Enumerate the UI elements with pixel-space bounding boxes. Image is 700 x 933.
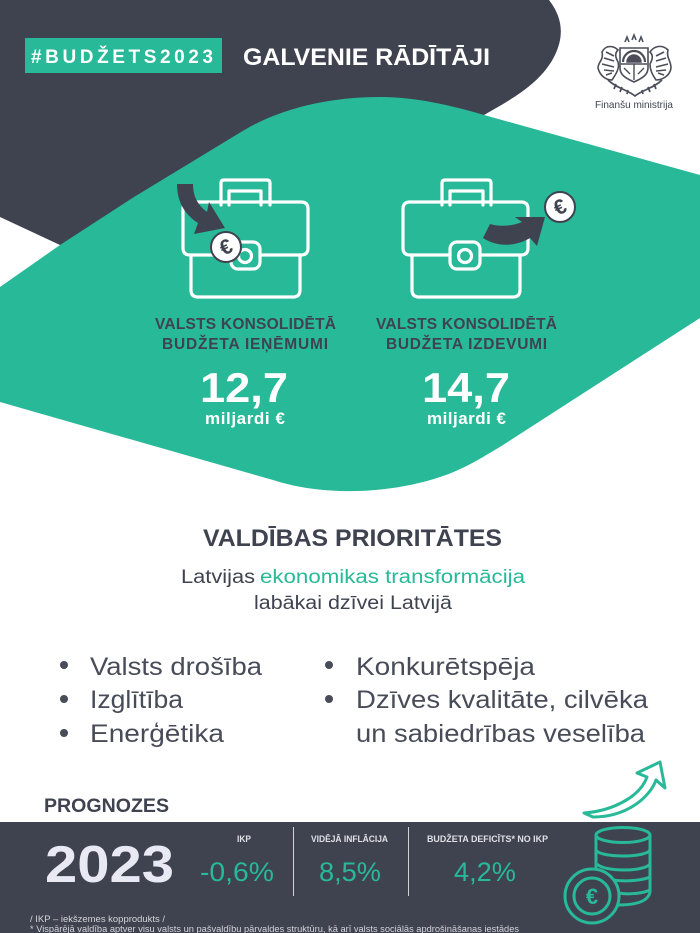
panel: budget revenue (155, 180, 336, 428)
panel: forecast band (0, 822, 700, 933)
metric: average inflation: VIDĒJĀ INFLĀCIJA (311, 834, 388, 845)
metric: GDP: -0,6% (200, 857, 274, 887)
expenditure value: miljardi € (427, 409, 507, 428)
revenue heading (155, 316, 336, 353)
priorities list: left column: Valsts drošība (90, 653, 262, 681)
expenditure value: 14,7 (422, 364, 510, 411)
icon: coin stack: € (586, 884, 598, 909)
icon: briefcase with outgoing coin (403, 180, 575, 297)
priorities list: left column: Izglītība (90, 686, 183, 714)
year: 2023 (45, 836, 174, 894)
background: dark shape (0, 0, 561, 245)
logo caption: Finanšu ministrija (595, 99, 673, 111)
priorities list: right column: Konkurētspēja (356, 653, 535, 681)
revenue value: miljardi € (205, 409, 286, 428)
priorities list: right column: Dzīves kvalitāte, cilvēka (356, 686, 648, 714)
expenditure heading: VALSTS KONSOLIDĒTĀ (376, 316, 557, 333)
priorities list: left column: Enerģētika (90, 720, 224, 748)
icon: rising arrow (584, 762, 665, 817)
metric: average inflation (311, 834, 388, 887)
metric: GDP: IKP (237, 834, 252, 845)
footnotes (30, 914, 520, 933)
metric: GDP (200, 834, 274, 887)
priorities list: left column (60, 653, 262, 748)
revenue value: 12,7 (200, 364, 288, 411)
expenditure heading (376, 316, 557, 353)
hashtag badge: #BUDŽETS2023 (31, 46, 213, 68)
metric: budget deficit (427, 833, 549, 887)
heading: forecasts: PROGNOZES (44, 796, 169, 817)
priorities list: right column: un sabiedrības veselība (356, 720, 645, 748)
icon: briefcase with incoming coin (177, 180, 308, 297)
priorities list: right column (325, 653, 648, 748)
expenditure value (422, 364, 510, 428)
subheading: labākai dzīvei Latvijā (254, 593, 452, 614)
revenue value (200, 364, 288, 428)
icon: briefcase with outgoing coin: € (550, 194, 571, 220)
icon: coat of arms (598, 35, 671, 96)
title: GALVENIE RĀDĪTĀJI (243, 44, 490, 71)
icon: briefcase with incoming coin: € (216, 234, 237, 260)
metric: budget deficit: 4,2% (454, 857, 516, 887)
subheading: ekonomikas transformācija (260, 567, 525, 588)
footnotes: / IKP – iekšzemes kopprodukts / (30, 914, 166, 924)
icon: coin stack (565, 828, 650, 923)
heading: government priorities: VALDĪBAS PRIORITĀTES (203, 525, 502, 552)
revenue heading: BUDŽETA IEŅĒMUMI (162, 335, 328, 353)
metric: average inflation: 8,5% (319, 857, 381, 887)
expenditure heading: BUDŽETA IZDEVUMI (386, 335, 547, 353)
metric: budget deficit: BUDŽETA DEFICĪTS* NO IKP (427, 833, 549, 845)
subheading (181, 567, 525, 614)
revenue heading: VALSTS KONSOLIDĒTĀ (155, 316, 336, 333)
subheading: Latvijas (181, 567, 255, 588)
panel: budget expenditure (376, 180, 575, 428)
hashtag badge (25, 38, 222, 73)
logo: Finanšu ministrija (595, 35, 673, 111)
background: green shape (0, 97, 700, 491)
